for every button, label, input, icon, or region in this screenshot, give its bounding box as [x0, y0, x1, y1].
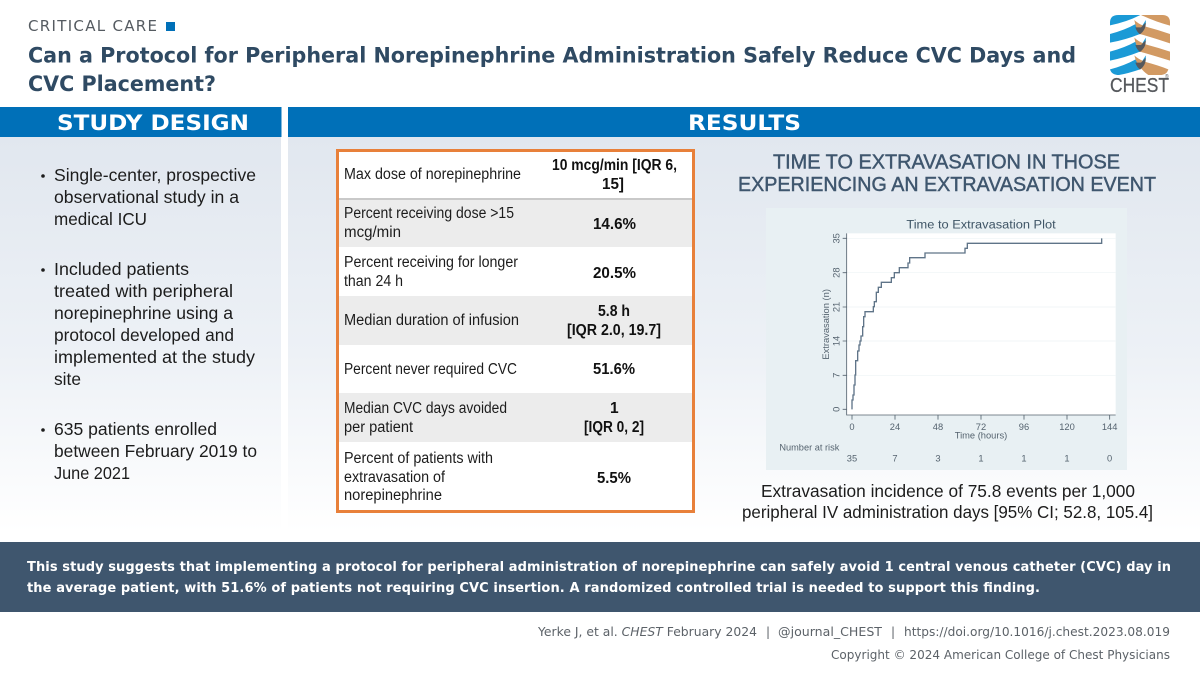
y axis labels: 28 [831, 267, 841, 278]
bullet: enrollment [41, 419, 257, 483]
chart caption: peripheral IV administration days [95% CI; 52.8, 105.4] [742, 502, 1153, 522]
row: dose above 15 [344, 205, 636, 241]
row: median duration: Median duration of infusion [344, 312, 519, 329]
x axis labels: 144 [1102, 422, 1117, 432]
x axis labels: 120 [1059, 422, 1075, 432]
row: longer than 24 h: 20.5% [593, 265, 636, 282]
row: max dose: 10 mcg/min [IQR 6, [552, 157, 677, 174]
y axis labels: 35 [831, 233, 841, 244]
row: CVC days avoided: per patient [344, 419, 414, 436]
bullet: inclusion: implemented at the study [54, 347, 255, 367]
row: median duration [344, 303, 661, 339]
y axis labels: 21 [831, 302, 841, 312]
icon: CHEST logo: ® [1165, 73, 1169, 80]
chart: time to extravasation plot [766, 208, 1127, 470]
x axis labels [849, 422, 1117, 441]
citation footer: | [766, 625, 770, 639]
row: extravasation: norepinephrine [344, 487, 442, 504]
x axis labels: 96 [1019, 422, 1029, 432]
bullet: setting: Single-center, prospective [54, 165, 256, 185]
chart title: Time to Extravasation Plot [906, 217, 1056, 231]
conclusion band: the average patient, with 51.6% of patients not requiring CVC insertion. A randomized controlled trial is needed to support this finding. [27, 581, 1040, 596]
number at risk: 1 [1064, 453, 1070, 463]
chart heading: TIME TO EXTRAVASATION IN THOSE [773, 152, 1120, 174]
row: never required CVC: Percent never required CVC [344, 361, 517, 378]
heading: study design: STUDY DESIGN [57, 111, 249, 135]
row: longer than 24 h: than 24 h [344, 273, 403, 290]
row: longer than 24 h [344, 254, 636, 290]
row: CVC days avoided: Median CVC days avoided [344, 400, 507, 417]
number at risk: 35 [847, 453, 857, 463]
chart caption [742, 481, 1153, 522]
citation footer [537, 625, 1170, 662]
row: never required CVC: 51.6% [593, 361, 635, 378]
citation footer: Copyright © 2024 American College of Chest Physicians [831, 648, 1170, 662]
citation footer: | [891, 625, 895, 639]
bullet: inclusion: treated with peripheral [54, 281, 233, 301]
chart heading [738, 152, 1156, 196]
x axis labels: 48 [933, 422, 943, 432]
x axis labels: Time (hours) [955, 431, 1007, 441]
bullet: inclusion: norepinephrine using a [54, 303, 233, 323]
number at risk: 0 [1107, 453, 1112, 463]
bullet: enrollment: 635 patients enrolled [54, 419, 217, 439]
panel: results [288, 107, 1200, 532]
row: dose above 15: mcg/min [344, 224, 401, 241]
y axis labels [821, 233, 841, 412]
row: extravasation: 5.5% [597, 470, 631, 487]
bullet: inclusion: Included patients [54, 259, 189, 279]
row: CVC days avoided: 1 [610, 400, 619, 417]
chart caption: Extravasation incidence of 75.8 events per 1,000 [761, 481, 1135, 501]
y axis labels: 7 [831, 373, 841, 378]
row: longer than 24 h: Percent receiving for longer [344, 254, 518, 271]
bullet: setting: observational study in a [54, 187, 239, 207]
number at risk: 1 [1021, 453, 1027, 463]
row: never required CVC [344, 361, 635, 378]
results table [338, 150, 694, 512]
number at risk: Number at risk [779, 443, 840, 453]
row: max dose: Max dose of norepinephrine [344, 166, 521, 183]
bullet: inclusion [41, 259, 255, 389]
x axis labels: 0 [849, 422, 855, 432]
row: CVC days avoided: [IQR 0, 2] [584, 419, 644, 436]
title: Can a Protocol for Peripheral Norepinephrine Administration Safely Reduce CVC Days and [28, 44, 1076, 68]
row: extravasation: extravasation of [344, 469, 446, 486]
y axis labels: 0 [831, 407, 841, 412]
row: max dose [344, 157, 677, 193]
number at risk: 3 [935, 453, 941, 463]
y axis labels: 14 [831, 336, 841, 346]
icon: CHEST logo: CHEST [1110, 75, 1169, 97]
number at risk [779, 443, 1112, 463]
number at risk: 7 [892, 453, 898, 463]
row: dose above 15: 14.6% [593, 216, 636, 233]
citation footer: https://doi.org/10.1016/j.chest.2023.08.019 [904, 625, 1170, 639]
heading: results: RESULTS [688, 111, 801, 135]
row: median duration: 5.8 h [598, 303, 630, 320]
y axis labels: Extravasation (n) [821, 289, 831, 360]
x axis labels: 72 [976, 422, 986, 432]
title [28, 44, 1076, 96]
icon: CHEST logo [1110, 15, 1170, 97]
title: CVC Placement? [28, 72, 216, 96]
row: extravasation: Percent of patients with [344, 450, 493, 467]
row: CVC days avoided [344, 400, 644, 436]
bullet: setting [41, 165, 256, 229]
category label: CRITICAL CARE [28, 17, 157, 35]
curve [852, 238, 1102, 409]
row: dose above 15: Percent receiving dose >15 [344, 205, 514, 222]
row: extravasation [344, 450, 631, 504]
citation footer: Yerke J, et al. CHEST February 2024 [537, 625, 757, 639]
row: max dose: 15] [602, 176, 624, 193]
heading: study design [0, 107, 282, 137]
citation footer: @journal_CHEST [778, 625, 883, 639]
heading: results [288, 107, 1200, 137]
bullet: enrollment: June 2021 [54, 463, 130, 483]
number at risk: 1 [978, 453, 984, 463]
panel: study design [0, 107, 282, 532]
conclusion band [0, 542, 1200, 612]
row: median duration: [IQR 2.0, 19.7] [567, 322, 661, 339]
chart heading: EXPERIENCING AN EXTRAVASATION EVENT [738, 174, 1156, 196]
conclusion band: This study suggests that implementing a protocol for peripheral administration of norepinephrine can safely avoid 1 central venous catheter (CVC) day in [27, 560, 1171, 575]
bullet: enrollment: between February 2019 to [54, 441, 257, 461]
bullet: inclusion: protocol developed and [54, 325, 234, 345]
bullet: setting: medical ICU [54, 209, 147, 229]
x axis labels: 24 [890, 422, 900, 432]
bullet: inclusion: site [54, 369, 81, 389]
